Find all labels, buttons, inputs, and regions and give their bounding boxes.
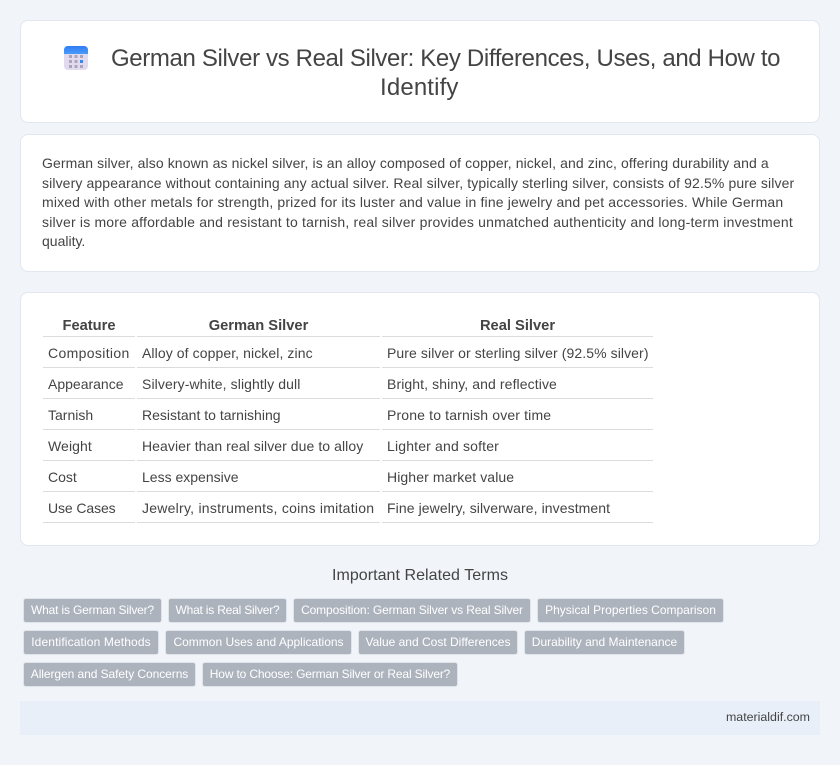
related terms chips: Composition: German Silver vs Real Silver bbox=[301, 603, 523, 617]
footer source text: materialdif.com bbox=[726, 710, 810, 724]
related terms chips: Allergen and Safety Concerns bbox=[31, 667, 188, 681]
related terms chips: Common Uses and Applications bbox=[173, 635, 344, 649]
related terms chips: Identification Methods bbox=[31, 635, 151, 649]
summary paragraph: silver is more affordable and resistant to tarnish, real silver provides unmatched authenticity and long-term investment bbox=[42, 214, 793, 230]
panel: title card bbox=[20, 20, 820, 123]
comparison table: Lighter and softer bbox=[387, 438, 499, 454]
related terms heading: Important Related Terms bbox=[332, 567, 508, 584]
comparison table: Bright, shiny, and reflective bbox=[387, 376, 557, 392]
header: German Silver: German Silver bbox=[209, 318, 308, 334]
comparison table: Heavier than real silver due to alloy bbox=[142, 438, 363, 454]
header: Feature: Feature bbox=[62, 318, 116, 334]
related terms chips bbox=[23, 598, 724, 687]
footer bar bbox=[20, 701, 820, 735]
comparison table: Alloy of copper, nickel, zinc bbox=[142, 345, 313, 361]
comparison table: Resistant to tarnishing bbox=[142, 407, 281, 423]
summary paragraph: quality. bbox=[42, 233, 85, 249]
related terms chips: What is Real Silver? bbox=[175, 603, 280, 617]
comparison table: Pure silver or sterling silver (92.5% silver) bbox=[387, 345, 649, 361]
title line 1: German Silver vs Real Silver: Key Differences, Uses, and How to bbox=[111, 45, 780, 72]
header: Real Silver: Real Silver bbox=[480, 318, 555, 334]
related terms chips: What is German Silver? bbox=[31, 603, 154, 617]
comparison table: Tarnish bbox=[48, 407, 93, 423]
panel: summary card bbox=[20, 134, 820, 272]
summary paragraph: silvery appearance without containing any actual silver. Real silver, typically sterling silver, consists of 92.5% pure silver bbox=[42, 175, 794, 191]
comparison table: Weight bbox=[48, 438, 92, 454]
icon: calendar bbox=[64, 46, 88, 70]
related terms chips: Durability and Maintenance bbox=[532, 635, 677, 649]
title line 2: Identify bbox=[380, 74, 459, 101]
summary paragraph: mixed with other metals for strength, prized for its luster and value in fine jewelry and pet accessories. While German bbox=[42, 194, 783, 210]
related terms chips: How to Choose: German Silver or Real Silver? bbox=[210, 667, 450, 681]
summary paragraph bbox=[42, 155, 794, 249]
comparison table: Higher market value bbox=[387, 469, 514, 485]
related terms chips: Physical Properties Comparison bbox=[545, 603, 716, 617]
related terms chips: Value and Cost Differences bbox=[366, 635, 510, 649]
comparison table: Less expensive bbox=[142, 469, 239, 485]
comparison table: Composition bbox=[48, 345, 130, 361]
summary paragraph: German silver, also known as nickel silver, is an alloy composed of copper, nickel, and zinc, offering durability and a bbox=[42, 155, 769, 171]
comparison table: Cost bbox=[48, 469, 77, 485]
comparison table: Fine jewelry, silverware, investment bbox=[387, 500, 610, 516]
comparison table: Prone to tarnish over time bbox=[387, 407, 551, 423]
comparison table: Appearance bbox=[48, 376, 124, 392]
comparison table: Jewelry, instruments, coins imitation bbox=[142, 500, 374, 516]
comparison table: Silvery-white, slightly dull bbox=[142, 376, 300, 392]
panel: comparison table card bbox=[20, 292, 820, 546]
comparison table: Use Cases bbox=[48, 500, 116, 516]
